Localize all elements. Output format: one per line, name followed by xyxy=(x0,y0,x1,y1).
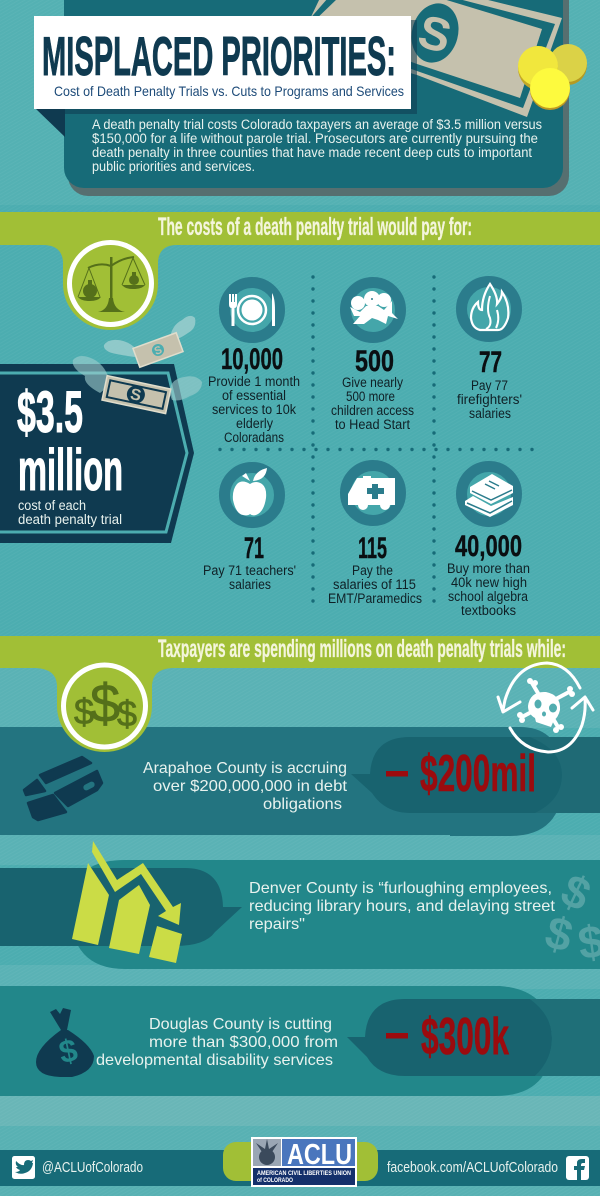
stat: EMT: 115 xyxy=(358,532,387,565)
title box xyxy=(34,16,411,109)
text: Denver: repairs" xyxy=(249,916,305,933)
text: Arapahoe: Arapahoe County is accruing xyxy=(143,760,347,777)
panel: Denver County band xyxy=(0,841,600,969)
stat: EMT: EMT/Paramedics xyxy=(328,591,422,606)
intro paragraph: A death penalty trial costs Colorado taxpayers an average of $3.5 million versus xyxy=(92,117,542,132)
stat: elderly services: Provide 1 month xyxy=(208,374,300,389)
stat: minus 300k: $300k xyxy=(421,1008,509,1066)
stat: firefighters: salaries xyxy=(469,406,511,421)
stat: head start: 500 xyxy=(355,345,394,378)
caption xyxy=(18,498,122,527)
stat: elderly services: Coloradans xyxy=(224,430,284,445)
section band: trial costs heading xyxy=(0,212,600,245)
panel: header intro xyxy=(64,0,587,196)
icon: declining chart xyxy=(72,841,182,963)
text: Denver: reducing library hours, and delaying street xyxy=(249,898,556,915)
stat: head start: Give nearly xyxy=(342,375,403,390)
stat: teachers xyxy=(203,468,296,592)
stat: EMT: salaries of 115 xyxy=(333,577,416,592)
icon: skull and arrows xyxy=(498,663,593,752)
unit: million xyxy=(18,438,123,503)
icon: plate xyxy=(224,282,280,338)
stat: elderly services: elderly xyxy=(236,416,273,431)
logo: ACLU xyxy=(223,1137,378,1187)
panel: Douglas County band xyxy=(0,986,600,1096)
stat: head start xyxy=(331,282,414,432)
intro paragraph: public priorities and services. xyxy=(92,159,255,174)
stat: head start: children access xyxy=(331,403,414,418)
stat: textbooks: textbooks xyxy=(461,603,516,618)
icon: coins xyxy=(518,44,587,110)
text: Douglas xyxy=(96,1016,338,1069)
caption: death penalty trial xyxy=(18,512,122,527)
icon: dollar bill xyxy=(300,0,562,117)
callout: $3.5 million xyxy=(0,364,194,543)
stat: firefighters: 77 xyxy=(479,346,502,379)
icon: children xyxy=(346,282,400,338)
icon: ambulance xyxy=(346,466,400,520)
stat: head start: to Head Start xyxy=(335,417,410,432)
dotted grid dividers xyxy=(220,277,534,604)
stat: textbooks: school algebra xyxy=(448,589,528,604)
intro paragraph: $150,000 for a life without parole trial. Prosecutors are currently pursuing the xyxy=(92,131,538,146)
text: Denver: Denver County is “furloughing employees, xyxy=(249,880,552,897)
icon: faded dollar signs: $ xyxy=(553,863,599,921)
icon: apple xyxy=(224,468,280,522)
amount: $3.5 xyxy=(17,380,83,445)
stat: elderly services: of essential xyxy=(222,388,286,403)
icon: dollars badge xyxy=(36,665,172,752)
stat: textbooks xyxy=(447,466,530,618)
stat: minus 200 million xyxy=(386,745,536,803)
stat: minus 300k xyxy=(386,1008,509,1066)
footer band xyxy=(0,1150,600,1186)
icon: faded dollar signs: $ xyxy=(540,905,578,962)
icon: credit card xyxy=(24,757,102,820)
stat: firefighters: Pay 77 xyxy=(471,378,508,393)
stat: textbooks: 40,000 xyxy=(455,530,522,563)
stat: textbooks: 40k new high xyxy=(451,575,527,590)
text: facebook url: facebook.com/ACLUofColorado xyxy=(387,1159,558,1176)
text: Denver xyxy=(249,880,556,933)
stat: teachers: Pay 71 teachers' xyxy=(203,563,296,578)
stat: EMT: Pay the xyxy=(352,563,393,578)
text: Douglas: developmental disability services xyxy=(96,1052,333,1069)
icon: money bag xyxy=(36,1008,94,1077)
text: twitter handle: @ACLUofColorado xyxy=(42,1159,143,1176)
icon: money bag: $ xyxy=(56,1031,81,1070)
icon: flying bill small xyxy=(104,316,195,367)
icon: scales badge xyxy=(45,242,175,330)
title box shadow xyxy=(65,20,417,114)
title banner fold xyxy=(36,109,65,137)
icon: dollar bill: S xyxy=(413,4,457,63)
icon: flying bill large: S xyxy=(129,386,143,405)
logo: ACLU: of COLORADO xyxy=(257,1178,293,1184)
panel: Arapahoe County band xyxy=(0,727,600,836)
stat: EMT xyxy=(328,466,422,606)
stat: elderly services xyxy=(208,282,300,445)
stat: firefighters xyxy=(457,282,522,421)
icon: faded dollar signs xyxy=(540,863,600,969)
intro paragraph: death penalty in three counties that have made recent deep cuts to important xyxy=(92,145,532,160)
text: Arapahoe: over $200,000,000 in debt xyxy=(153,778,348,795)
icon: dollars badge: $ xyxy=(90,674,120,734)
stat: elderly services: 10,000 xyxy=(221,343,283,376)
text: Arapahoe: obligations xyxy=(263,796,342,813)
logo: ACLU: AMERICAN CIVIL LIBERTIES UNION xyxy=(257,1171,351,1177)
icon: dollars badge: $ xyxy=(117,693,137,734)
stat: head start: 500 more xyxy=(346,389,395,404)
icon: books xyxy=(462,466,516,522)
stat: elderly services: services to 10k xyxy=(212,402,296,417)
logo: ACLU: ACLU xyxy=(287,1139,352,1171)
icon: dollars badge: $ xyxy=(74,691,94,732)
icon: twitter xyxy=(12,1156,35,1179)
stat: teachers: salaries xyxy=(229,577,271,592)
subtitle: Cost of Death Penalty Trials vs. Cuts to Programs and Services xyxy=(54,83,404,99)
intro paragraph xyxy=(92,117,542,174)
text: Douglas: Douglas County is cutting xyxy=(149,1016,332,1033)
stat: textbooks: Buy more than xyxy=(447,561,530,576)
stat: firefighters: firefighters' xyxy=(457,392,522,407)
icon: flying bill large xyxy=(73,356,202,414)
icon: flying bill small: S xyxy=(153,344,164,358)
icon: flame xyxy=(462,282,516,336)
caption: cost of each xyxy=(18,498,86,513)
icon: facebook xyxy=(566,1156,589,1180)
text: Arapahoe xyxy=(143,760,348,813)
stat: teachers: 71 xyxy=(244,532,264,565)
text: Douglas: more than $300,000 from xyxy=(149,1034,338,1051)
section band: taxpayers heading xyxy=(0,635,600,668)
